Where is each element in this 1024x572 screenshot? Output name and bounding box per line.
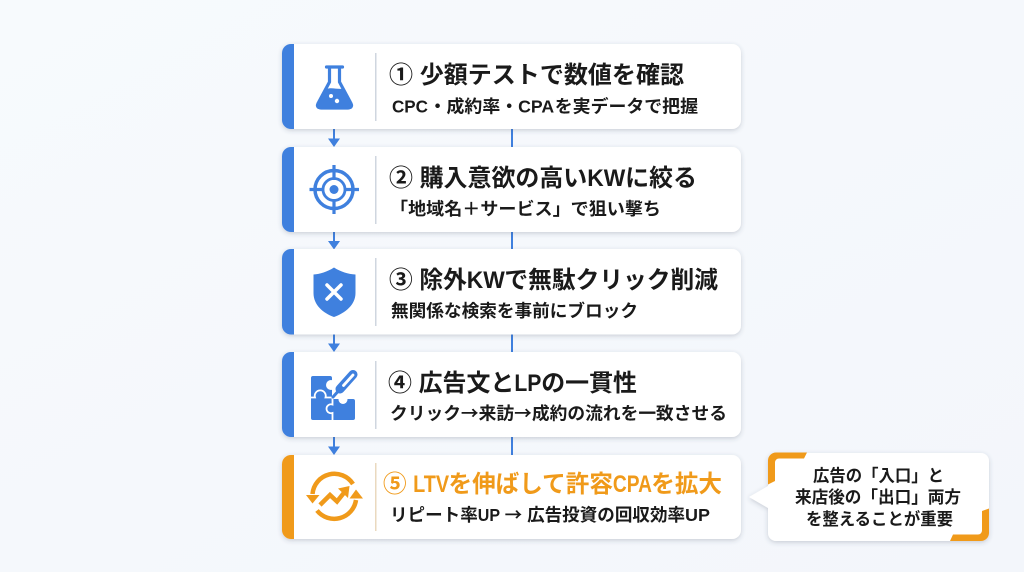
panel: step 4 <box>282 352 741 437</box>
panel: step 5 <box>282 455 741 539</box>
icon: shield <box>314 268 356 317</box>
callout corner: top left <box>768 452 807 484</box>
heading: step 5: ⑤ LTVを伸ばして許容CPAを拡大 <box>383 471 722 498</box>
heading: step 4: ④ 広告文とLPの一貫性 <box>388 370 637 397</box>
connector arrows between cards <box>328 129 512 455</box>
text: step 2 detail: 「地域名＋サービス」で狙い撃ち <box>390 199 661 219</box>
panel: step 3 <box>282 249 741 334</box>
text: step 3 detail: 無関係な検索を事前にブロック <box>391 301 638 321</box>
heading: step 3: ③ 除外KWで無駄クリック削減 <box>389 267 718 294</box>
icon: target <box>310 165 359 214</box>
heading: step 2: ② 購入意欲の高いKWに絞る <box>389 165 697 192</box>
callout text <box>795 466 961 529</box>
icon: growth cycle <box>306 474 363 519</box>
panel: step 1 <box>282 44 741 129</box>
heading: step 1: ① 少額テストで数値を確認 <box>389 62 684 89</box>
callout <box>749 452 989 541</box>
panel: step 2 <box>282 147 741 232</box>
icon: puzzle and link <box>311 374 355 420</box>
text: step 1 detail: CPC・成約率・CPAを実データで把握 <box>392 96 698 116</box>
callout text: 広告の「入口」と <box>813 466 944 486</box>
text: step 5 detail: リピート率UP → 広告投資の回収効率UP <box>390 502 710 527</box>
callout corner: bottom right <box>950 508 989 541</box>
callout text: 来店後の「出口」両方 <box>795 487 961 507</box>
text: step 4 detail: クリック→来訪→成約の流れを一致させる <box>390 400 727 426</box>
icon: flask <box>316 67 353 109</box>
callout text: を整えることが重要 <box>806 509 953 529</box>
